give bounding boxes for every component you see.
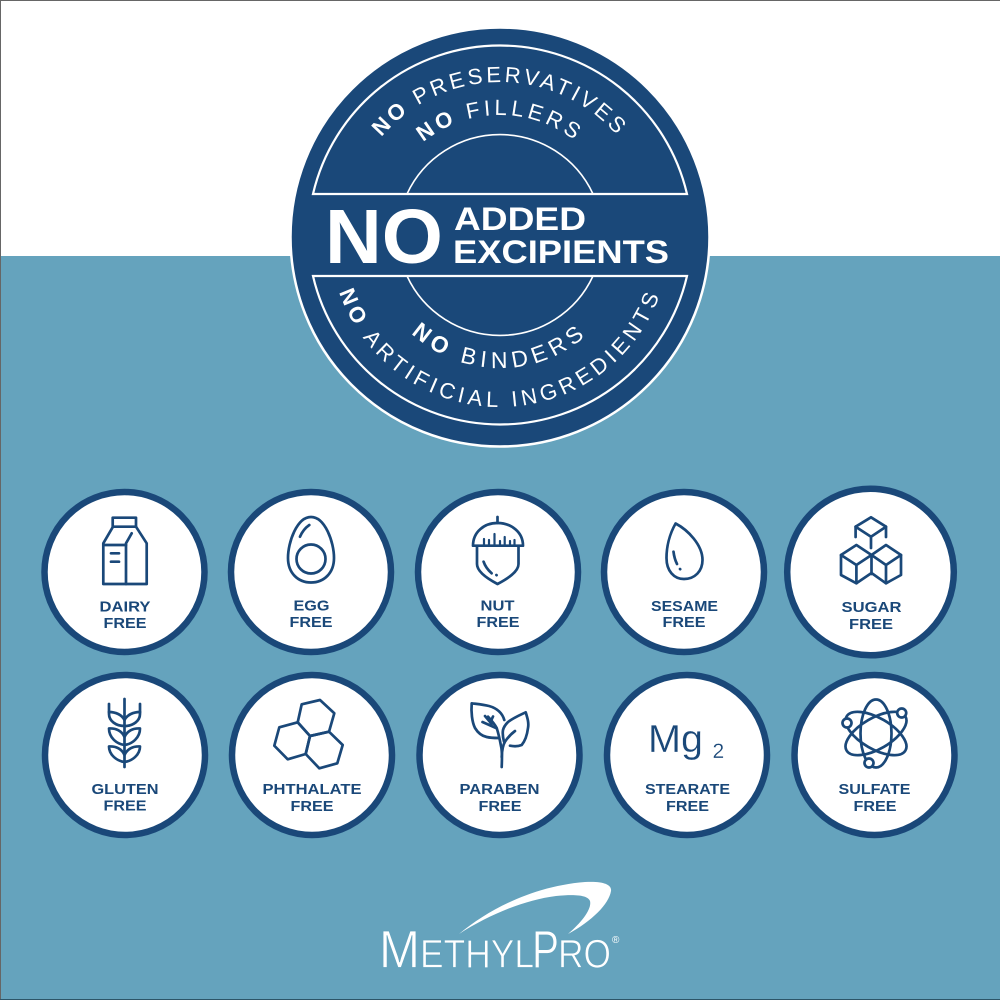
badge text: no artificial ingredients: NO ARTIFICIAL INGREDIENTS — [340, 288, 658, 407]
label: dairy free — [100, 598, 150, 632]
badge headline: NO: NO — [325, 194, 443, 280]
logo wordmark — [379, 920, 620, 980]
icon: Mg2 formula: 2 — [712, 740, 724, 763]
logo wordmark: P — [532, 920, 559, 980]
label: sesame free: SESAME — [651, 598, 718, 615]
label: phthalate free: PHTHALATE — [262, 781, 362, 798]
label: stearate free: STEARATE — [645, 781, 730, 798]
badge text: no binders: NO BINDERS — [412, 322, 582, 368]
label: sugar free: SUGAR — [842, 599, 902, 616]
panel: egg free — [231, 492, 391, 652]
icon: leaves — [471, 703, 528, 767]
label: sugar free — [842, 599, 902, 633]
icon: hexagons — [274, 700, 343, 768]
label: sulfate free: SULFATE — [838, 781, 910, 798]
panel: gluten free — [45, 675, 205, 835]
panel: phthalate free — [232, 675, 392, 835]
label: stearate free — [645, 781, 730, 815]
label: nut free — [476, 598, 520, 631]
label: sulfate free — [838, 781, 910, 815]
panel: sesame free — [604, 492, 764, 652]
icon: atom — [839, 700, 913, 768]
badge text: no preservatives: NO PRESERVATIVES — [371, 66, 625, 136]
logo wordmark: ETHYL — [420, 932, 534, 976]
label: paraben free — [460, 781, 540, 815]
icon: acorn — [473, 517, 523, 584]
label: sugar free: FREE — [849, 616, 893, 633]
icon: sesame seed — [666, 524, 702, 579]
label: nut free: NUT — [480, 598, 514, 615]
label: egg free: EGG — [294, 598, 330, 615]
panel: sugar free — [787, 489, 954, 655]
label: gluten free — [92, 781, 158, 815]
label: paraben free: PARABEN — [460, 781, 540, 798]
label: gluten free: FREE — [104, 798, 146, 815]
icon: Mg2 formula: Mg — [648, 718, 703, 761]
label: dairy free: FREE — [104, 615, 146, 632]
label: sesame free: FREE — [662, 614, 706, 631]
logo swoosh — [459, 882, 611, 934]
label: nut free: FREE — [476, 614, 520, 631]
label: phthalate free: FREE — [290, 798, 334, 815]
badge headline: added: ADDED — [454, 201, 586, 237]
icon: sugar cubes — [841, 517, 901, 583]
badge headline: excipients: EXCIPIENTS — [453, 234, 669, 270]
logo wordmark: ® — [612, 935, 620, 946]
badge: no added excipients — [290, 28, 710, 448]
panel: nut free — [418, 492, 578, 652]
label: sesame free — [651, 598, 718, 631]
label: egg free — [290, 598, 332, 631]
panel: dairy free — [44, 492, 204, 652]
label: paraben free: FREE — [478, 798, 522, 815]
panel: sulfate free — [794, 675, 954, 835]
label: dairy free: DAIRY — [100, 598, 150, 616]
icon: egg — [288, 517, 334, 582]
icon: wheat — [109, 699, 140, 767]
panel: paraben free — [420, 675, 580, 835]
logo: MethylPro — [379, 882, 620, 980]
label: phthalate free — [262, 781, 362, 815]
label: gluten free: GLUTEN — [92, 781, 158, 798]
badge text: no fillers: NO FILLERS — [416, 100, 580, 142]
label: sulfate free: FREE — [854, 798, 896, 815]
panel: stearate free — [607, 675, 767, 835]
logo wordmark: M — [379, 920, 420, 980]
icon: milk carton — [103, 518, 147, 584]
label: stearate free: FREE — [666, 798, 709, 815]
label: egg free: FREE — [290, 614, 332, 631]
logo wordmark: RO — [558, 932, 611, 976]
icon: Mg2 formula — [648, 718, 724, 763]
